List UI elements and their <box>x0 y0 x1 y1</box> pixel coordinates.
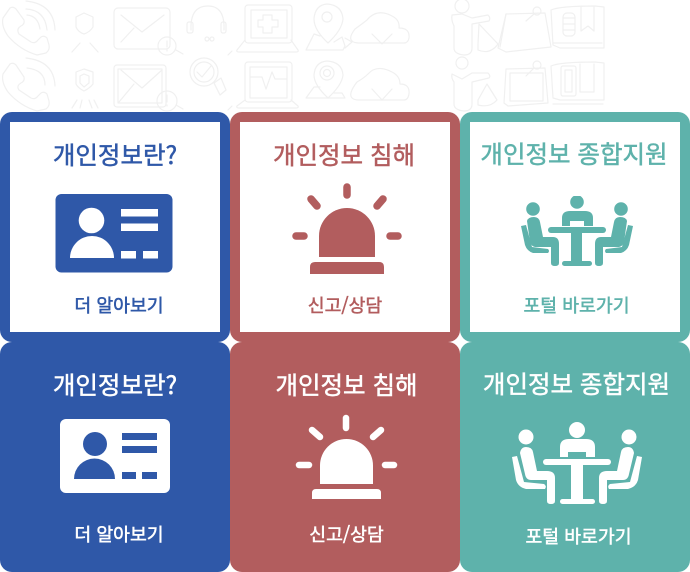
panel: personal info outline card <box>0 112 230 342</box>
icon: shield person row 2 <box>72 69 98 108</box>
icon: phone row 2 <box>3 58 55 111</box>
icon: headset <box>187 6 226 41</box>
icon: phone row 1 <box>3 1 55 55</box>
icon: magnifier check <box>190 58 226 95</box>
icon: meeting <box>521 196 633 266</box>
heading: comprehensive support: 개인정보 종합지원 <box>483 366 670 401</box>
heading: privacy violation: 개인정보 침해 <box>275 367 418 402</box>
link label: learn more: 더 알아보기 <box>74 521 164 547</box>
panel: personal info filled card <box>0 342 230 572</box>
icon: person with scales row 1 <box>452 0 498 55</box>
icon: open book row 1 <box>551 6 604 48</box>
panel: support portal outline card <box>460 112 690 342</box>
link label: go to portal: 포털 바로가기 <box>523 292 630 318</box>
link label: go to portal: 포털 바로가기 <box>525 523 632 549</box>
icon: ID card <box>56 194 172 272</box>
heading: what is personal info: 개인정보란? <box>53 137 177 172</box>
icon: laptop pulse <box>228 62 298 110</box>
heading: comprehensive support: 개인정보 종합지원 <box>480 136 668 171</box>
heading: privacy violation: 개인정보 침해 <box>273 137 415 172</box>
icon: person with scales row 2 <box>452 57 497 111</box>
icon: cloud download row 1 <box>345 13 409 48</box>
heading: what is personal info: 개인정보란? <box>53 367 177 402</box>
panel: support portal filled card <box>460 342 690 572</box>
icon: cloud download row 2 <box>351 68 409 100</box>
link label: learn more: 더 알아보기 <box>74 292 164 318</box>
link label: report and consult: 신고/상담 <box>308 292 382 318</box>
icon: ID card <box>60 419 170 493</box>
icon: laptop cross <box>228 5 298 55</box>
icon: open book row 2 <box>551 62 604 104</box>
icon: meeting <box>512 422 642 504</box>
panel: privacy violation outline card <box>230 112 460 342</box>
icon: map pin row 2 <box>306 61 345 98</box>
link label: report and consult: 신고/상담 <box>309 521 384 547</box>
icon: note and pin row 1 <box>498 7 551 52</box>
icon: note and pin row 2 <box>504 61 548 106</box>
icon: map pin row 1 <box>306 4 345 50</box>
icon: shield person row 1 <box>72 13 98 52</box>
background faint icon pattern <box>2 0 604 112</box>
icon: mail row 2 <box>114 65 183 111</box>
panel: privacy violation filled card <box>230 342 460 572</box>
icon: siren <box>296 414 398 499</box>
icon: mail row 1 <box>114 8 183 55</box>
icon: siren <box>292 183 402 274</box>
